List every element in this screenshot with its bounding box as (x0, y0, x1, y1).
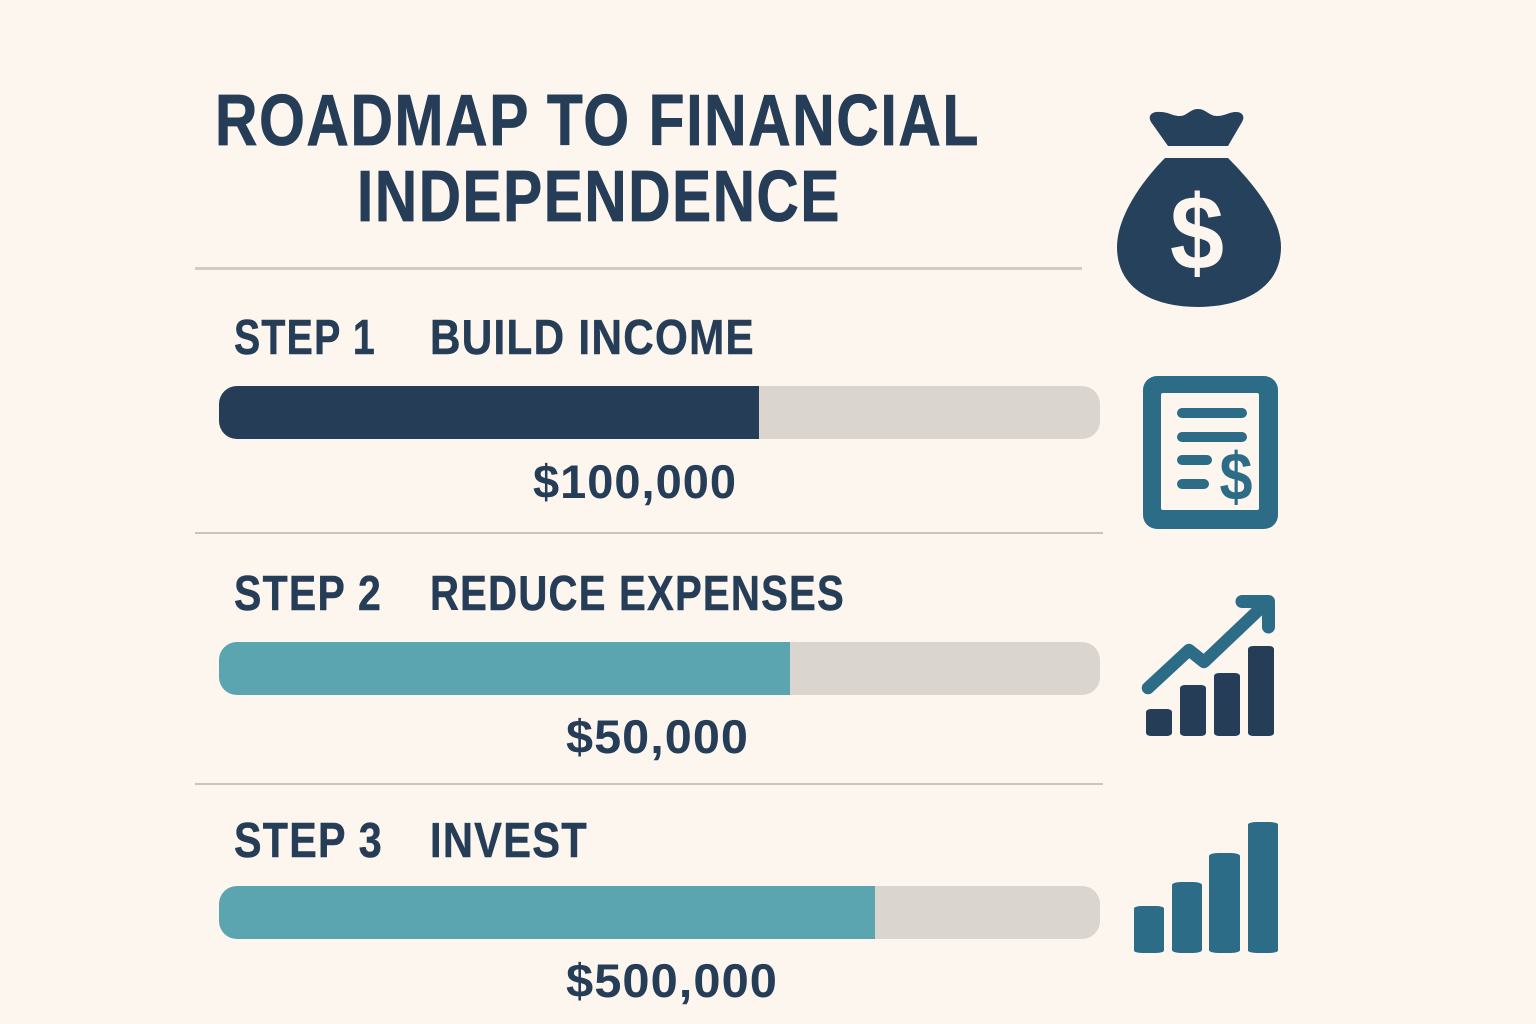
step 2 heading (234, 567, 845, 621)
panel: step 3 (219, 814, 1100, 1007)
title: INDEPENDENCE (357, 157, 841, 237)
step 1 amount: $100,000 (533, 455, 737, 508)
title (215, 81, 980, 237)
step 1 progress bar (219, 386, 1100, 439)
step 1 heading (234, 311, 755, 365)
step 1 heading: BUILD INCOME (430, 311, 755, 365)
step 2 amount: $50,000 (566, 710, 749, 763)
step 2 heading: REDUCE EXPENSES (430, 567, 845, 621)
icon: invoice document: $ (1220, 439, 1252, 515)
icon: money bag: $ (1170, 174, 1224, 292)
step 3 heading (234, 814, 588, 868)
step 1 heading: STEP 1 (234, 311, 376, 365)
icon: money bag (1117, 109, 1281, 307)
icon: invoice document (1143, 376, 1278, 529)
step 3 heading: INVEST (430, 814, 588, 868)
step 3 heading: STEP 3 (234, 814, 383, 868)
step 3 amount: $500,000 (566, 954, 778, 1007)
step 2 heading: STEP 2 (234, 567, 382, 621)
step 2 progress bar (219, 642, 1100, 695)
icon: bar chart (1134, 822, 1278, 953)
panel: step 1 (219, 311, 1100, 508)
icon: growth chart with arrow (1146, 602, 1274, 736)
title: ROADMAP TO FINANCIAL (215, 81, 980, 161)
panel: step 2 (219, 567, 1100, 763)
step 3 progress bar (219, 886, 1100, 939)
